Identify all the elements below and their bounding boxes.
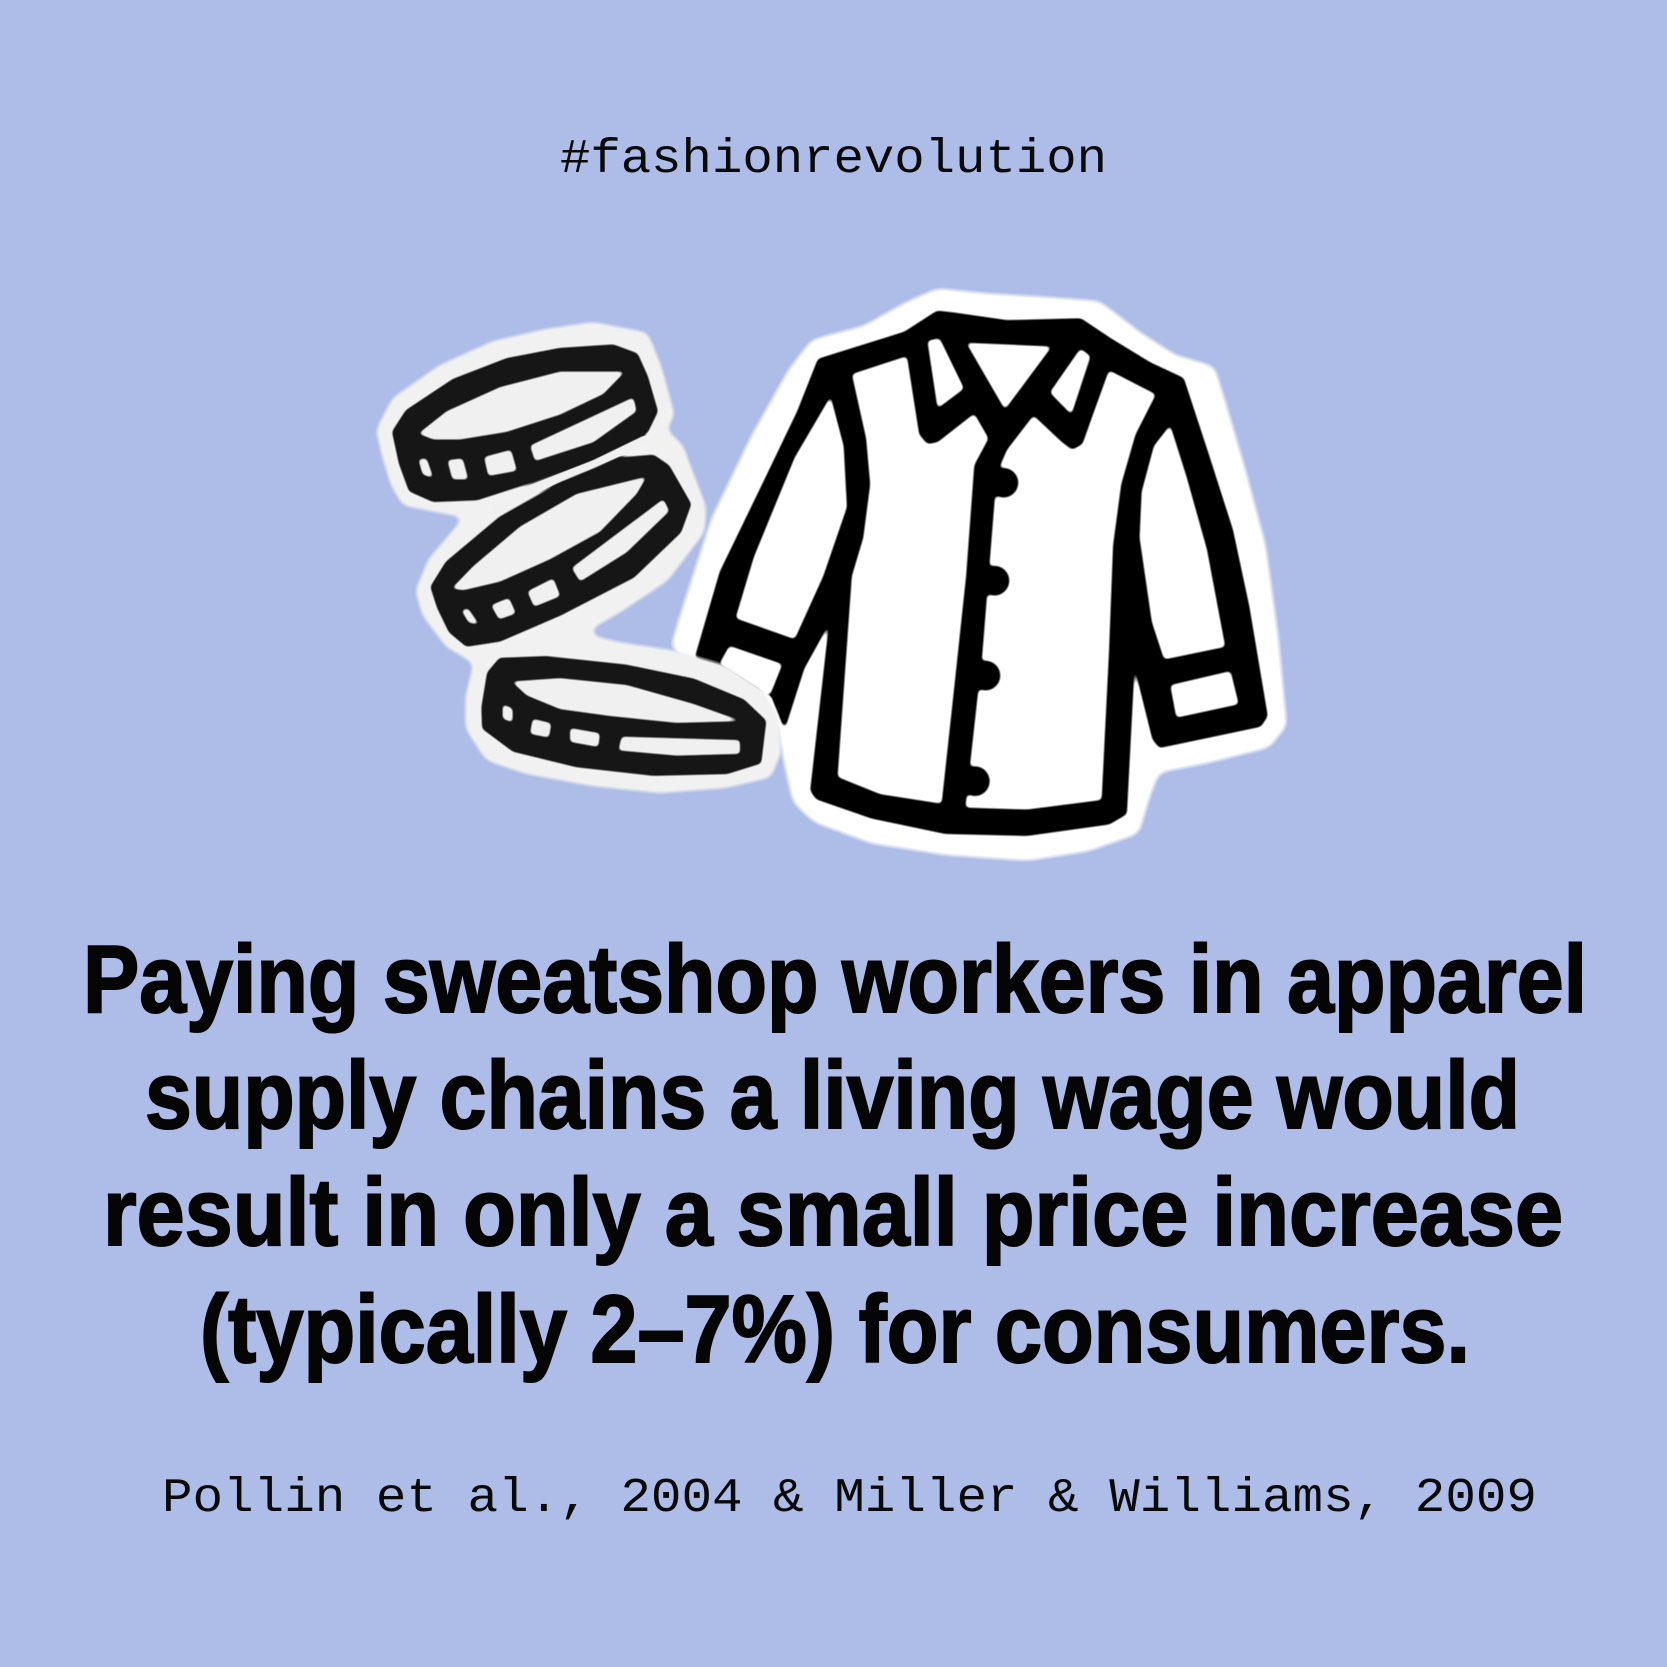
main statement text: supply chains a living wage would <box>145 1042 1520 1149</box>
icon: stack of three coins sticker <box>377 323 780 792</box>
main statement text: (typically 2–7%) for consumers. <box>200 1276 1470 1383</box>
source citation: Pollin et al., 2004 & Miller & Williams, 2009 <box>162 1472 1537 1526</box>
icon: shirt sticker <box>672 290 1285 859</box>
main statement text <box>83 926 1587 1383</box>
hashtag heading: #fashionrevolution <box>560 133 1107 187</box>
